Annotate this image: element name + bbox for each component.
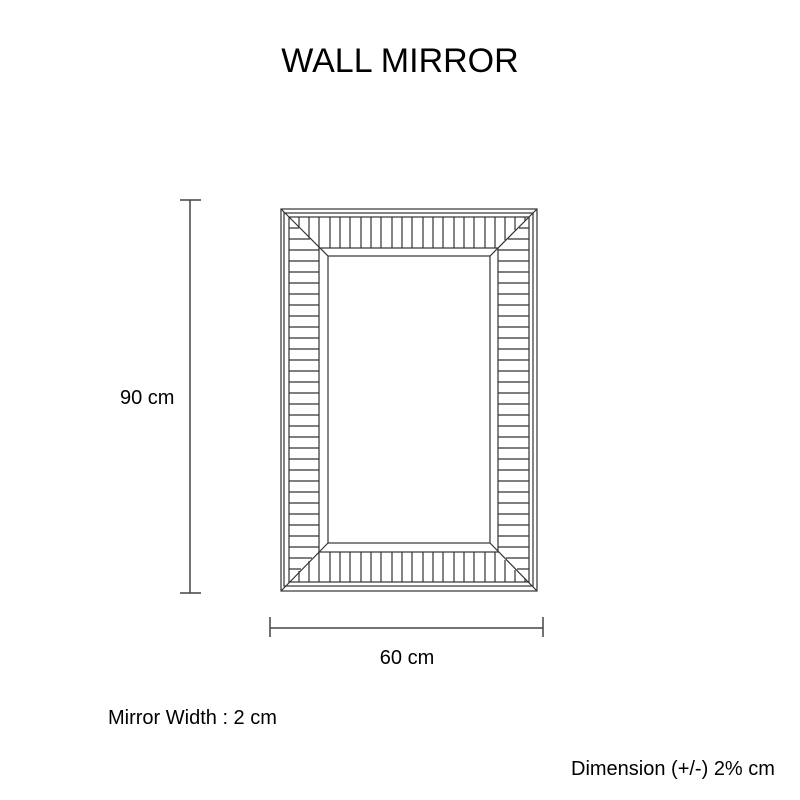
dimension: width 60 cm bbox=[270, 617, 543, 637]
mirror frame drawing bbox=[281, 209, 537, 591]
note: mirror width: Mirror Width : 2 cm bbox=[108, 707, 277, 729]
note: dimension tolerance: Dimension (+/-) 2% cm bbox=[571, 758, 775, 780]
title: WALL MIRROR bbox=[281, 42, 519, 80]
dimension: height 90 cm bbox=[180, 200, 201, 593]
label: 90 cm: 90 cm bbox=[120, 387, 174, 409]
bottom strip lines bbox=[299, 552, 525, 582]
right strip lines bbox=[498, 228, 529, 569]
label: 60 cm: 60 cm bbox=[380, 647, 434, 669]
top strip lines bbox=[299, 217, 525, 248]
left strip lines bbox=[289, 228, 319, 569]
